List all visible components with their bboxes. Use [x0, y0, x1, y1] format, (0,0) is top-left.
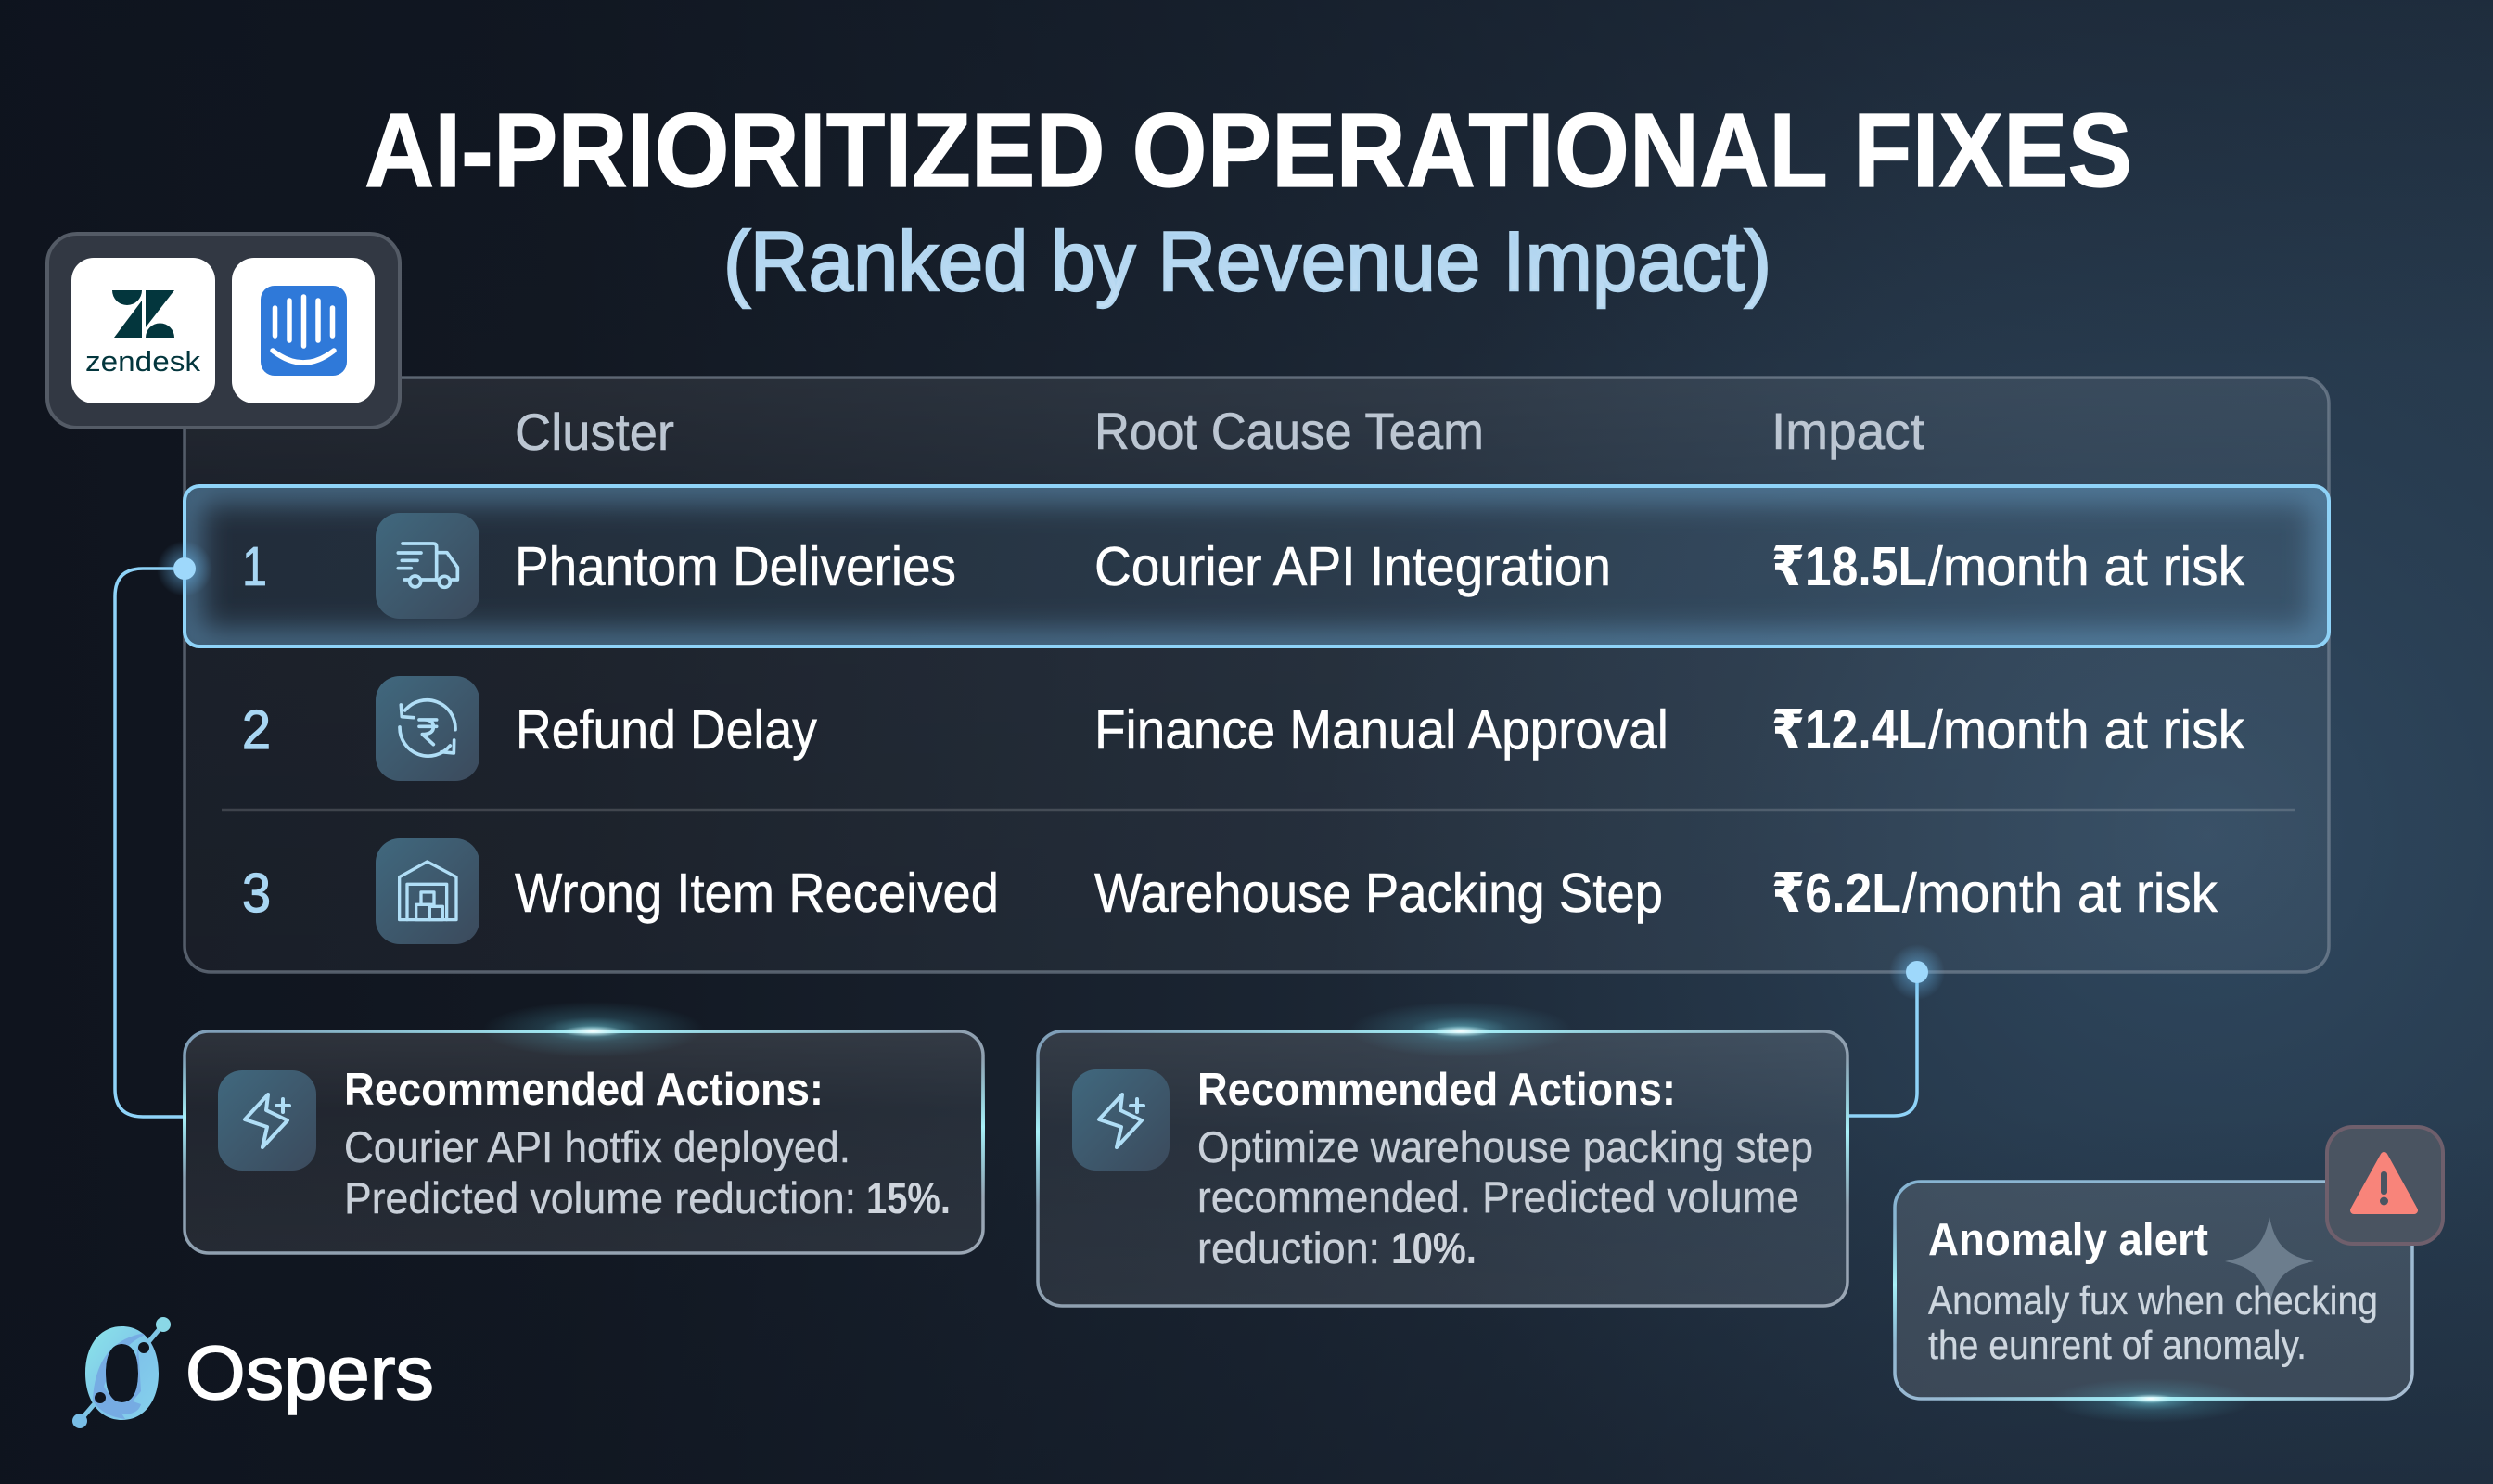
- impact amount: ₹18.5L: [1771, 536, 1927, 597]
- root cause team: Courier API Integration: [1094, 536, 1611, 597]
- cluster name: Refund Delay: [516, 699, 817, 761]
- rank 1: 1: [242, 536, 267, 597]
- card body: Anomaly fux when checking: [1928, 1278, 2378, 1324]
- impact amount: ₹6.2L: [1771, 863, 1901, 924]
- card body: [344, 1122, 951, 1222]
- logo: zendesk: zendesk: [85, 345, 201, 377]
- impact unit: /month at risk: [1928, 536, 2244, 597]
- icon: background sparkle: [2225, 1217, 2314, 1306]
- card body: reduction:: [1197, 1223, 1380, 1273]
- card body: Predicted volume reduction:: [344, 1173, 856, 1222]
- bottom glow: [1938, 1378, 2365, 1423]
- icon: warehouse: [376, 838, 479, 944]
- impact unit: /month at risk: [1902, 863, 2218, 924]
- connector node: row 1: [157, 541, 212, 596]
- title: AI-PRIORITIZED OPERATIONAL FIXES: [364, 92, 2132, 209]
- impact amount: ₹12.4L: [1771, 699, 1927, 761]
- icon: warning badge: [2327, 1127, 2443, 1244]
- cluster name: Phantom Deliveries: [515, 536, 956, 597]
- rank 2: 2: [242, 699, 271, 761]
- card body: the eunrent of anomaly.: [1928, 1323, 2307, 1368]
- panel: integration logos: [47, 234, 400, 428]
- top glow: [1085, 1002, 1827, 1057]
- logo: ospers: [72, 1317, 434, 1428]
- table header: cluster: Cluster: [515, 403, 674, 461]
- wordmark: Ospers: [185, 1331, 434, 1415]
- connector node: row 3: [1889, 944, 1945, 1000]
- panel: anomaly alert: [1893, 1182, 2412, 1423]
- card body: [1928, 1278, 2378, 1368]
- table header: root cause team: Root Cause Team: [1094, 402, 1484, 460]
- card body: Optimize warehouse packing step: [1197, 1122, 1813, 1171]
- cluster name: Wrong Item Received: [515, 863, 999, 924]
- row 1 highlighted: [185, 486, 2329, 646]
- subtitle: (Ranked by Revenue Impact): [723, 215, 1771, 309]
- row 2: [242, 676, 2244, 781]
- root cause team: Finance Manual Approval: [1094, 699, 1668, 761]
- row 3: [242, 838, 2218, 944]
- card body: [1197, 1122, 1813, 1273]
- logo: intercom: [232, 258, 375, 403]
- table header: impact: Impact: [1771, 402, 1924, 460]
- connector: row 3 to second recommended actions: [1847, 972, 1917, 1116]
- icon: delivery truck: [376, 513, 479, 619]
- icon: sparkle bolt: [218, 1070, 316, 1171]
- logo mark: [72, 1317, 171, 1428]
- panel: recommended actions warehouse: [1036, 1002, 1849, 1306]
- card heading: Recommended Actions:: [344, 1065, 824, 1115]
- card heading: Recommended Actions:: [1197, 1065, 1676, 1115]
- icon: sparkle bolt: [1072, 1069, 1170, 1171]
- panel: ranking table: [185, 377, 2329, 972]
- impact unit: /month at risk: [1928, 699, 2244, 761]
- panel: recommended actions courier: [183, 1002, 985, 1253]
- card body: recommended. Predicted volume: [1197, 1172, 1799, 1222]
- card heading: Anomaly alert: [1928, 1215, 2208, 1265]
- rank 3: 3: [242, 863, 271, 924]
- connector: row 1 to first recommended actions: [115, 569, 185, 1117]
- card body: Courier API hotfix deployed.: [344, 1122, 850, 1171]
- card body: 15%.: [866, 1173, 951, 1222]
- root cause team: Warehouse Packing Step: [1094, 863, 1663, 924]
- top glow: [232, 1002, 955, 1057]
- logo: zendesk: [71, 258, 215, 403]
- icon: rupee refund: [376, 676, 479, 781]
- card body: 10%.: [1391, 1223, 1477, 1273]
